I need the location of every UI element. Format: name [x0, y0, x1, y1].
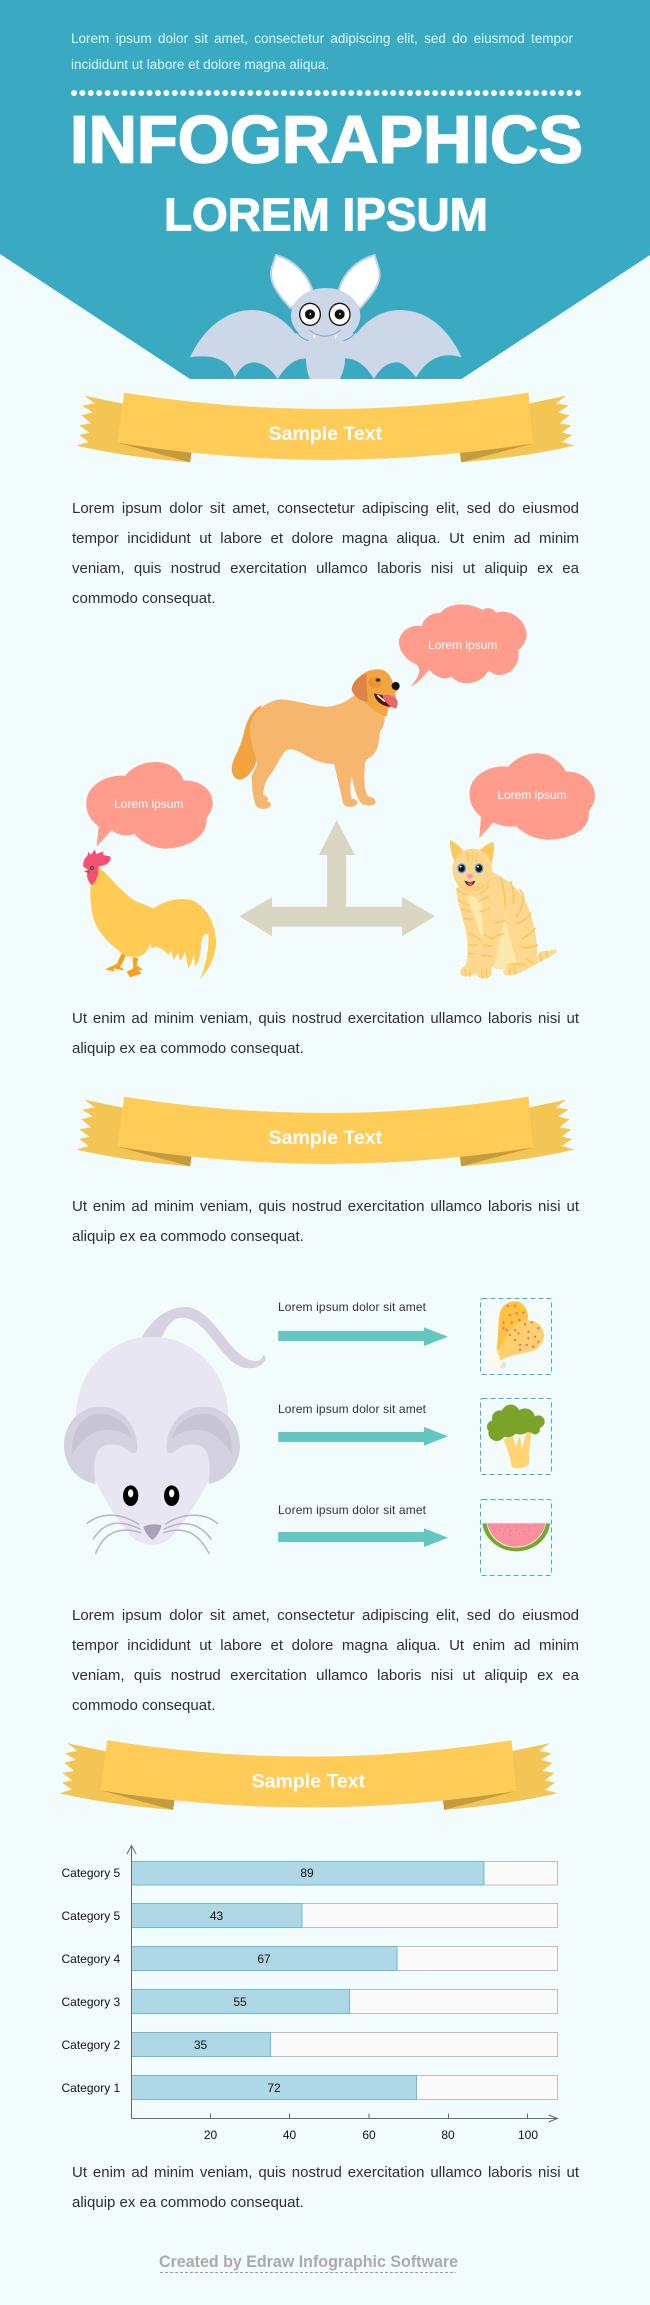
mouse tail: [142, 1307, 266, 1368]
bar: category 4: [62, 1946, 558, 1970]
food box: watermelon: [480, 1500, 552, 1576]
intro text: [71, 31, 573, 72]
paragraph 1: tempor incididunt ut labore et dolore magna aliqua. Ut enim ad minim: [72, 530, 579, 547]
paragraph 2: [72, 1010, 579, 1056]
icon: dog: [232, 669, 400, 809]
bar: category 2: 35: [194, 2038, 207, 2052]
bar chart: [62, 1846, 558, 2142]
subtitle: LOREM IPSUM: [164, 188, 488, 240]
paragraph 4: tempor incididunt ut labore et dolore magna aliqua. Ut enim ad minim: [72, 1636, 579, 1654]
bar: category 3: [62, 1990, 558, 2014]
header panel: [0, 0, 650, 379]
bubble: cat: [469, 753, 595, 840]
bar: category 1: 72: [267, 2081, 281, 2095]
icon: mouse: [64, 1307, 266, 1553]
paragraph 1: commodo consequat.: [72, 590, 215, 607]
bar: category 5 second: 43: [210, 1909, 223, 1923]
paragraph 2: Ut enim ad minim veniam, quis nostrud exercitation ullamco laboris nisi ut: [72, 1010, 579, 1026]
paragraph 5: aliquip ex ea commodo consequat.: [72, 2194, 304, 2211]
ribbon label: Sample Text: [269, 1127, 383, 1149]
paragraph 4: Lorem ipsum dolor sit amet, consectetur adipiscing elit, sed do eiusmod: [72, 1606, 579, 1624]
food box: drumsticks: [480, 1298, 552, 1374]
x axis labels: 40: [283, 2128, 296, 2142]
title: INFOGRAPHICS: [70, 102, 583, 178]
ribbon 2: [76, 1097, 574, 1166]
bar: category 3: 55: [233, 1995, 247, 2009]
paragraph 3: [72, 1198, 579, 1245]
bar: category 5 top: [62, 1862, 558, 1885]
paragraph 4: commodo consequat.: [72, 1696, 215, 1714]
paragraph 1: Lorem ipsum dolor sit amet, consectetur adipiscing elit, sed do eiusmod: [72, 500, 579, 517]
paragraph 3: aliquip ex ea commodo consequat.: [72, 1228, 304, 1245]
row 3 arrow: [278, 1528, 448, 1547]
ribbon label: Sample Text: [269, 423, 383, 445]
bar: category 5 second: Category 5: [62, 1909, 121, 1923]
bar: category 2: Category 2: [62, 2038, 121, 2052]
bar: category 2: [62, 2032, 558, 2056]
food box: broccoli: [480, 1398, 552, 1474]
arrows: three-way: [239, 820, 435, 936]
x axis labels: 100: [518, 2128, 538, 2142]
icon: rooster: [83, 849, 216, 979]
bubble: rooster: [86, 762, 213, 849]
paragraph 4: [72, 1606, 579, 1714]
bar: category 5 second: [62, 1904, 558, 1928]
x axis labels: 60: [362, 2128, 376, 2142]
paragraph 5: Ut enim ad minim veniam, quis nostrud exercitation ullamco laboris nisi ut: [72, 2164, 579, 2181]
ribbon label: Sample Text: [252, 1771, 366, 1793]
bar: category 1: Category 1: [62, 2081, 121, 2095]
row 1 label: Lorem ipsum dolor sit amet: [278, 1300, 427, 1314]
bar: category 4: Category 4: [62, 1952, 121, 1966]
bar: category 3: Category 3: [62, 1995, 121, 2009]
bar: category 4: 67: [257, 1952, 271, 1966]
intro text: Lorem ipsum dolor sit amet, consectetur adipiscing elit, sed do eiusmod tempor: [71, 31, 573, 46]
paragraph 4: veniam, quis nostrud exercitation ullamco laboris nisi ut aliquip ex ea: [72, 1666, 579, 1684]
ribbon 3: [59, 1740, 557, 1810]
paragraph 1: [72, 500, 579, 607]
row 2 label: Lorem ipsum dolor sit amet: [278, 1402, 427, 1416]
bar: category 5 top: Category 5: [62, 1866, 121, 1880]
ribbon 1: [76, 393, 574, 462]
bubble: dog: Lorem ipsum: [428, 638, 497, 652]
paragraph 1: veniam, quis nostrud exercitation ullamco laboris nisi ut aliquip ex ea: [72, 560, 579, 577]
icon: cat: [450, 840, 557, 979]
paragraph 2: aliquip ex ea commodo consequat.: [72, 1040, 304, 1056]
x axis labels: 20: [204, 2128, 217, 2142]
footer credit: Created by Edraw Infographic Software: [159, 2252, 458, 2271]
bubble: rooster: Lorem ipsum: [114, 797, 183, 811]
paragraph 5: [72, 2164, 579, 2211]
bar: category 1: [62, 2076, 558, 2100]
row 2 arrow: [278, 1427, 448, 1446]
chart axes: [127, 1846, 558, 2122]
bar: category 5 top: 89: [300, 1866, 314, 1880]
row 3 label: Lorem ipsum dolor sit amet: [278, 1503, 427, 1517]
paragraph 3: Ut enim ad minim veniam, quis nostrud exercitation ullamco laboris nisi ut: [72, 1198, 579, 1215]
x axis labels: [204, 2128, 538, 2142]
intro text: incididunt ut labore et dolore magna aliqua.: [71, 57, 329, 72]
bubble: cat: Lorem ipsum: [497, 788, 567, 802]
row 1 arrow: [278, 1327, 448, 1346]
bubble: dog: [399, 605, 527, 687]
dotted divider: [74, 90, 578, 96]
x axis labels: 80: [441, 2128, 455, 2142]
icon: bat: [190, 255, 462, 379]
